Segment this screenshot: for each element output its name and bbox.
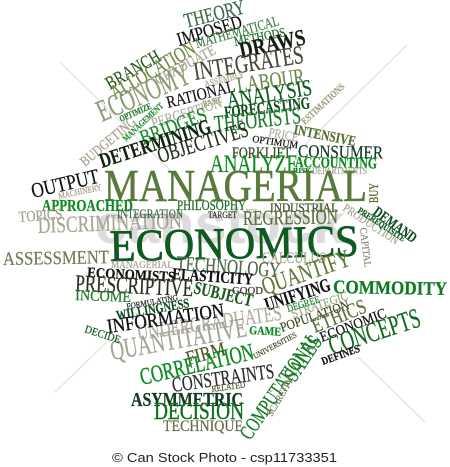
- PRICE: PRICE: [267, 124, 300, 145]
- ELASTICITY: ELASTICITY: [172, 264, 254, 289]
- LABOUR: LABOUR: [235, 64, 307, 98]
- ASSEMBLY: ASSEMBLY: [203, 69, 246, 89]
- DEPARTMENTS: DEPARTMENTS: [312, 166, 367, 176]
- CORRELATION: CORRELATION: [138, 339, 256, 391]
- INDUSTRIAL: INDUSTRIAL: [270, 200, 338, 215]
- PRODUCTION: PRODUCTION: [340, 201, 402, 248]
- WILLINGNESS: WILLINGNESS: [115, 295, 190, 323]
- QUANTIFY: QUANTIFY: [258, 245, 354, 301]
- ANALYZE: ANALYZE: [210, 151, 298, 178]
- INTEGRATION: INTEGRATION: [117, 206, 183, 221]
- TOPICS: TOPICS: [18, 206, 63, 226]
- CAPITAL: CAPITAL: [357, 227, 373, 268]
- FORECASTING: FORECASTING: [223, 93, 311, 122]
- TECHNOLOGY: TECHNOLOGY: [176, 251, 281, 282]
- PREREQUISITE: PREREQUISITE: [356, 205, 407, 244]
- SUBJECT: SUBJECT: [192, 277, 255, 310]
- UNDERGRADUATES: UNDERGRADUATES: [135, 300, 283, 345]
- MANAGERIAL: MANAGERIAL: [104, 161, 367, 211]
- radiating grey lines: [55, 45, 425, 422]
- DETERMINING: DETERMINING: [96, 114, 214, 173]
- OUTPUT: OUTPUT: [29, 164, 101, 203]
- ECONOMIC: ECONOMIC: [318, 306, 389, 346]
- ANALYSIS: ANALYSIS: [225, 75, 314, 113]
- GRADUATE: GRADUATE: [152, 42, 219, 89]
- TARGET: TARGET: [208, 210, 237, 220]
- BELTS: BELTS: [246, 208, 257, 215]
- UNIFYING: UNIFYING: [262, 275, 333, 316]
- watermark: canstock: [95, 192, 346, 255]
- METHODS: METHODS: [233, 24, 287, 49]
- RATIONAL: RATIONAL: [164, 77, 237, 112]
- OPTIMUM: OPTIMUM: [252, 134, 299, 151]
- PHILOSOPHY: PHILOSOPHY: [177, 198, 246, 214]
- ASYMMETRIC: ASYMMETRIC: [131, 389, 243, 411]
- ESTIMATIONS: ESTIMATIONS: [300, 81, 348, 127]
- ECONOMICS: ECONOMICS: [109, 216, 359, 271]
- APPROACHED: APPROACHED: [42, 196, 133, 215]
- PERCEPTION: PERCEPTION: [149, 95, 224, 132]
- CONSUMER: CONSUMER: [298, 141, 383, 162]
- OBJECTIVES: OBJECTIVES: [154, 116, 251, 168]
- IMPOSED: IMPOSED: [174, 12, 245, 51]
- DECIDE: DECIDE: [83, 323, 122, 346]
- BASIC: BASIC: [202, 94, 223, 109]
- TECHNIQUE: TECHNIQUE: [163, 418, 243, 435]
- MATHEMATICAL: MATHEMATICAL: [194, 13, 281, 52]
- COMPUTATIONAL: COMPUTATIONAL: [234, 328, 324, 444]
- DISCRIMINATION: DISCRIMINATION: [37, 208, 182, 238]
- INFORMATION: INFORMATION: [106, 300, 226, 338]
- REGRESSION: REGRESSION: [243, 204, 338, 230]
- BRANCH: BRANCH: [102, 46, 165, 94]
- INCOME: INCOME: [75, 287, 131, 306]
- GOOD: GOOD: [232, 285, 263, 297]
- ALLOCATION: ALLOCATION: [106, 36, 200, 104]
- MACHINERY: MACHINERY: [57, 182, 103, 201]
- THEORISTS: THEORISTS: [213, 103, 302, 138]
- ECONOMISTS: ECONOMISTS: [87, 265, 176, 286]
- MANAGEMENT: MANAGEMENT: [121, 101, 165, 143]
- CONSTRAINTS: CONSTRAINTS: [170, 359, 276, 397]
- QUANTITATIVE: QUANTITATIVE: [108, 312, 249, 367]
- INTENSIVE: INTENSIVE: [292, 122, 357, 150]
- DEFINES: DEFINES: [320, 343, 362, 368]
- INTEGRATES: INTEGRATES: [191, 40, 306, 86]
- ACCOUNTING: ACCOUNTING: [295, 154, 377, 172]
- SCARCITY: SCARCITY: [265, 376, 296, 418]
- GAME: GAME: [249, 323, 282, 339]
- FORMULATING: FORMULATING: [126, 293, 179, 311]
- FORKLIFT: FORKLIFT: [232, 145, 291, 162]
- RISK: RISK: [293, 166, 311, 175]
- BRIDGES: BRIDGES: [136, 102, 210, 150]
- SALES: SALES: [278, 330, 327, 386]
- ETHICS: ETHICS: [308, 294, 370, 338]
- ASSESSMENT: ASSESSMENT: [3, 247, 109, 270]
- BUDGETING: BUDGETING: [77, 114, 140, 170]
- PRESCRIPTIVE: PRESCRIPTIVE: [75, 271, 194, 302]
- OPTIMIZE: OPTIMIZE: [118, 101, 153, 124]
- DRAWS: DRAWS: [237, 25, 308, 63]
- POPULATION: POPULATION: [278, 297, 351, 335]
- ECONOMY: ECONOMY: [91, 57, 195, 128]
- FIRM: FIRM: [184, 338, 228, 370]
- DEGREE: DEGREE: [286, 294, 321, 315]
- DECISION: DECISION: [154, 399, 244, 425]
- UNIVERSITIES: UNIVERSITIES: [252, 330, 298, 361]
- small MANAGERIAL: MANAGERIAL: [111, 260, 173, 271]
- BUY: BUY: [366, 183, 381, 203]
- footer credit: © Can Stock Photo - csp11733351: [112, 451, 337, 465]
- CALCULUS: CALCULUS: [262, 250, 326, 267]
- RELATED: RELATED: [211, 379, 246, 394]
- STRATEGIC: STRATEGIC: [289, 288, 350, 321]
- DEMAND: DEMAND: [370, 204, 420, 247]
